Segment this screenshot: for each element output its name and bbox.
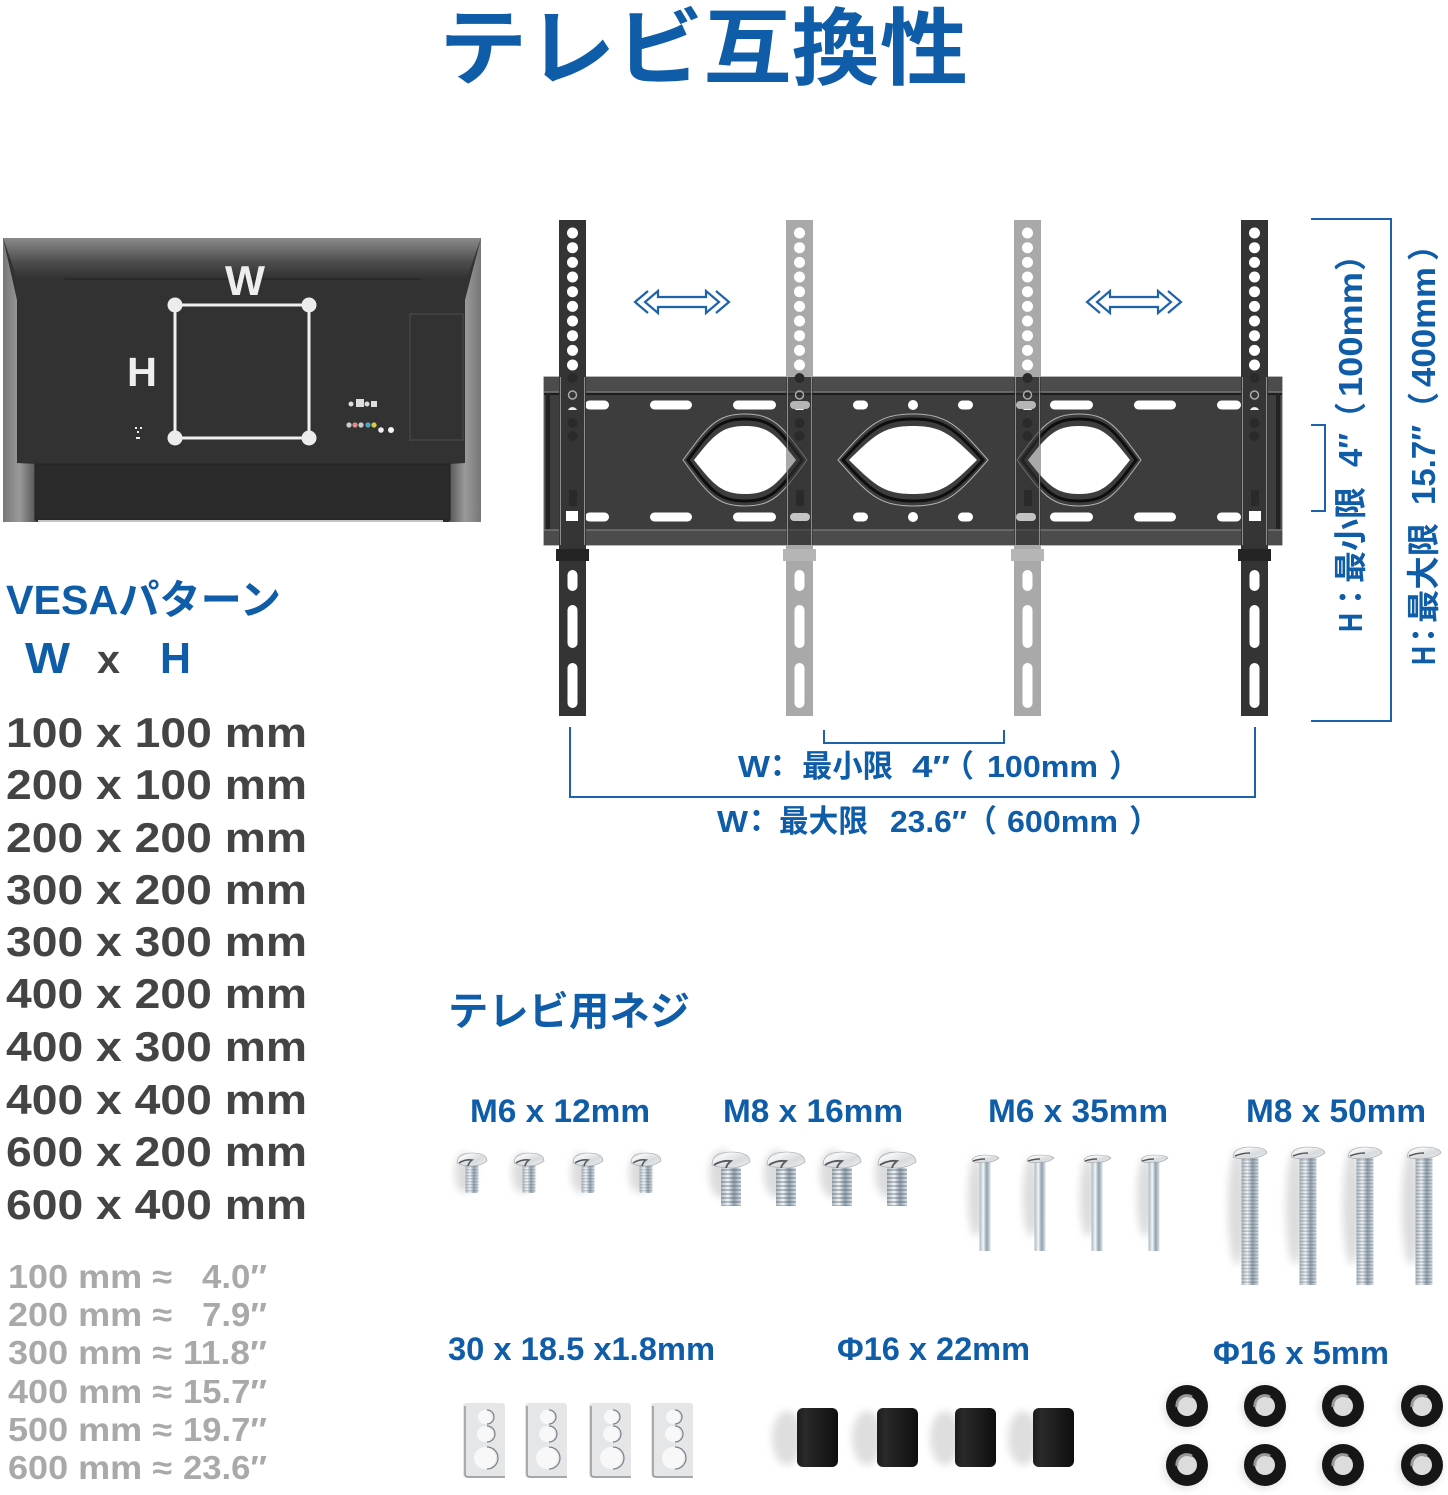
dimension: min width bracket: [824, 730, 1004, 743]
tv lower section: [35, 464, 450, 520]
label: max width: ）: [1129, 804, 1160, 839]
list: mm to inch conversion: 23.6″: [183, 1449, 267, 1486]
label: min width: [738, 749, 1140, 784]
label: max height: （: [1406, 392, 1442, 424]
label: min height: 100mm: [1332, 272, 1369, 397]
tv top bevel: [3, 238, 481, 278]
label: min width: 4″: [912, 749, 950, 784]
label: min height: 最小限: [1332, 487, 1369, 583]
label: min width: 最小限: [802, 749, 893, 784]
arrow: right rail adjustment: [1087, 291, 1181, 313]
list: VESA sizes: 200 x 200 mm: [6, 814, 307, 861]
label: M8 x 50mm: M8 x 50mm: [1246, 1093, 1426, 1129]
list: mm to inch conversion: 4.0″: [202, 1258, 267, 1295]
list: mm to inch conversion: 500 mm ≈: [8, 1411, 172, 1448]
VESA square: [168, 298, 316, 446]
screws: M8 x 16mm: [709, 1150, 916, 1206]
screws: M6 x 12mm: [455, 1153, 661, 1193]
spacers: Φ16 x 22mm: [772, 1408, 1074, 1467]
tv body: [3, 238, 481, 522]
grey rail, inner left: [783, 220, 816, 716]
list: mm to inch conversion: [8, 1258, 267, 1486]
list: mm to inch conversion: 600 mm ≈: [8, 1449, 172, 1486]
tv left side edge: [3, 238, 36, 522]
centre lens cutout: [838, 414, 988, 506]
label: max width: （: [966, 804, 997, 839]
heading: W x H: x: [97, 638, 120, 682]
label: min height: ）: [1333, 239, 1369, 271]
label: M6 x 12mm: M6 x 12mm: [470, 1093, 650, 1129]
label: M8 x 16mm: M8 x 16mm: [723, 1093, 903, 1129]
label: min height: H: [1332, 613, 1369, 632]
list: mm to inch conversion: 200 mm ≈: [8, 1296, 172, 1333]
list: mm to inch conversion: 300 mm ≈: [8, 1334, 172, 1371]
tv right side edge: [449, 238, 481, 522]
heading: W x H: [25, 634, 191, 683]
black rail, outer right: [1238, 220, 1271, 716]
list: mm to inch conversion: 100 mm ≈: [8, 1258, 172, 1295]
label: max width: 600mm: [1007, 804, 1118, 839]
plate slots: [585, 400, 1241, 522]
label: min height: [1332, 239, 1369, 632]
heading: W x H: H: [160, 634, 191, 683]
list: mm to inch conversion: 400 mm ≈: [8, 1373, 172, 1410]
label: M6 x 35mm: M6 x 35mm: [988, 1093, 1168, 1129]
arrow: left rail adjustment: [635, 291, 729, 313]
label: max width: [717, 804, 1160, 839]
panel: tv back with VESA pattern: [3, 238, 481, 522]
list: mm to inch conversion: 7.9″: [202, 1296, 267, 1333]
label: max height: 15.7″: [1405, 425, 1442, 505]
tv bottom highlight: [38, 520, 443, 522]
label: max width: 23.6″: [890, 804, 967, 839]
black rail, outer left: [556, 220, 589, 716]
label: min height: ：: [1333, 581, 1369, 613]
label: min width: （: [943, 749, 974, 784]
label: min height: 4″: [1332, 433, 1369, 467]
label: min width: W: [738, 749, 771, 784]
ports: [346, 399, 394, 433]
list: VESA sizes: 200 x 100 mm: [6, 761, 307, 808]
list: VESA sizes: 400 x 300 mm: [6, 1023, 307, 1070]
screws: M6 x 35mm: [968, 1155, 1168, 1251]
label: max height: ：: [1406, 619, 1442, 651]
right lens cutout: [1017, 414, 1141, 506]
label: max height: 400mm: [1405, 267, 1442, 387]
tv top groove: [65, 278, 420, 280]
label W: W: [225, 257, 265, 304]
list: mm to inch conversion: 11.8″: [183, 1334, 267, 1371]
list: VESA sizes: 300 x 300 mm: [6, 918, 307, 965]
list: mm to inch conversion: 19.7″: [183, 1411, 267, 1448]
label: max height: H: [1405, 646, 1442, 665]
label: max height: [1405, 229, 1442, 665]
label: max height: 最大限: [1405, 523, 1442, 623]
list: VESA sizes: 600 x 200 mm: [6, 1128, 307, 1175]
list: VESA sizes: 100 x 100 mm: [6, 709, 307, 756]
label: max width: 最大限: [779, 804, 868, 839]
label: min width: 100mm: [987, 749, 1098, 784]
heading: TV screws: テレビ用ネジ: [448, 990, 690, 1034]
heading: VESA pattern: VESAパターン: [6, 577, 281, 623]
dimension: min height bracket: [1311, 425, 1325, 511]
label: min height: （: [1333, 402, 1369, 434]
title: テレビ互換性: [439, 2, 968, 96]
list: VESA sizes: [6, 709, 307, 1228]
list: VESA sizes: 400 x 200 mm: [6, 970, 307, 1017]
tv right compartment: [410, 314, 463, 440]
list: VESA sizes: 600 x 400 mm: [6, 1181, 307, 1228]
label: min width: ）: [1109, 749, 1140, 784]
plates: 30 x 18.5 x1.8mm: [463, 1403, 693, 1478]
heading: W x H: W: [25, 634, 71, 683]
washers: Φ16 x 5mm: [1163, 1385, 1443, 1489]
dimension: max width bracket: [570, 727, 1255, 797]
grey rail, inner right: [1011, 220, 1044, 716]
dimension: max height bracket: [1311, 219, 1391, 721]
label: 30 x 18.5 x1.8mm: 30 x 18.5 x1.8mm: [448, 1331, 715, 1367]
label: max height: ）: [1406, 229, 1442, 261]
list: mm to inch conversion: 15.7″: [183, 1373, 267, 1410]
left lens cutout: [683, 414, 807, 506]
panel: wall bracket: [544, 220, 1282, 716]
power socket: [135, 427, 142, 439]
label: Φ16 x 22mm: Φ16 x 22mm: [837, 1331, 1030, 1367]
label H: H: [127, 349, 157, 395]
label: min width: ：: [762, 749, 793, 784]
mounting plate: [544, 377, 1282, 545]
label: max width: W: [717, 804, 749, 839]
list: VESA sizes: 300 x 200 mm: [6, 866, 307, 913]
label: Φ16 x 5mm: Φ16 x 5mm: [1213, 1335, 1389, 1371]
list: VESA sizes: 400 x 400 mm: [6, 1076, 307, 1123]
screws: M8 x 50mm: [1228, 1147, 1441, 1285]
label: max width: ：: [741, 804, 772, 839]
